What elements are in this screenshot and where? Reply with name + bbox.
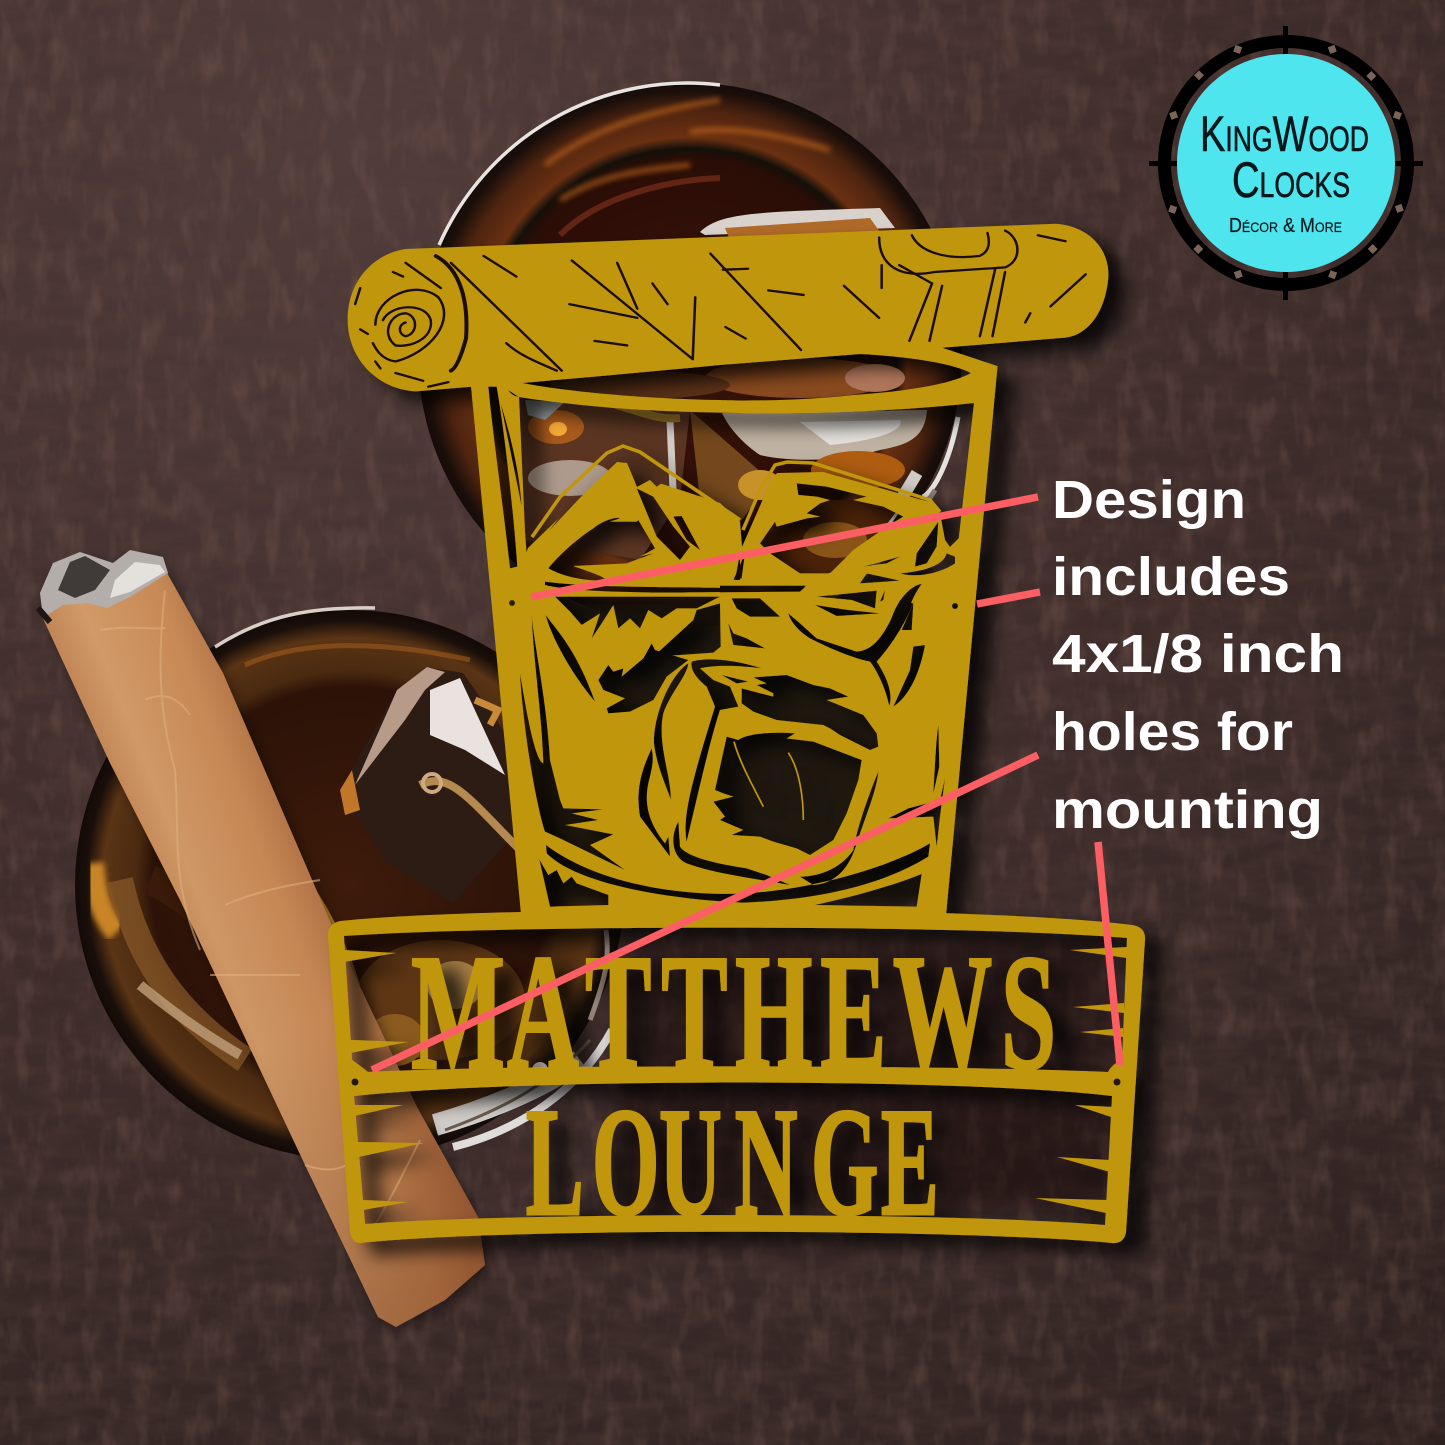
cigar ash xyxy=(40,550,168,618)
callout text: mounting hole note: includes xyxy=(1052,547,1290,607)
logo: wordmark: KingWood xyxy=(1200,106,1369,162)
callout text: mounting hole note: mounting xyxy=(1052,780,1323,840)
lower glass gold reflections behind plate xyxy=(355,940,525,1060)
sign: mounting holes xyxy=(352,1078,1120,1086)
logo: ring studs xyxy=(1168,45,1404,279)
cigar body xyxy=(40,573,485,1327)
callout text: mounting hole note: Design xyxy=(1052,470,1246,530)
logo: black ring xyxy=(1164,42,1408,284)
left ice cube xyxy=(519,397,690,560)
photo: lit cigar xyxy=(38,550,485,1327)
sign: cigar and whisky glass silhouette xyxy=(348,224,1108,919)
big ice cube xyxy=(340,667,518,903)
rim opening reflections xyxy=(705,358,895,398)
photo: upper whisky glass xyxy=(418,83,962,627)
logo: wordmark xyxy=(1200,106,1369,237)
callout text: mounting hole note xyxy=(1052,470,1344,840)
logo: KingWood Clocks badge xyxy=(1149,26,1423,300)
cigar veins xyxy=(100,590,420,1230)
logo: cyan disc xyxy=(1177,54,1395,272)
callout lines pointing to mounting holes xyxy=(372,497,1120,1070)
sign: MATTHEWS lettering: MATTHEWS xyxy=(411,920,1056,1104)
logo: crosshair ticks xyxy=(1149,26,1423,300)
right ice cube xyxy=(690,410,770,530)
logo: wordmark: Décor & More xyxy=(1229,215,1342,237)
metal sign xyxy=(328,224,1145,1249)
sign: LOUNGE lettering: LOUNGE xyxy=(526,1077,939,1249)
logo: wordmark: Clocks xyxy=(1232,152,1350,208)
callout text: mounting hole note: holes for xyxy=(1052,702,1293,762)
callout text: mounting hole note: 4x1/8 inch xyxy=(1052,624,1344,684)
sign: plate spikes xyxy=(344,947,1127,1213)
photo: lower whisky glass xyxy=(75,608,625,1160)
cigar cut lines and band xyxy=(355,231,1086,387)
sign: name plate frame xyxy=(328,910,1145,1243)
